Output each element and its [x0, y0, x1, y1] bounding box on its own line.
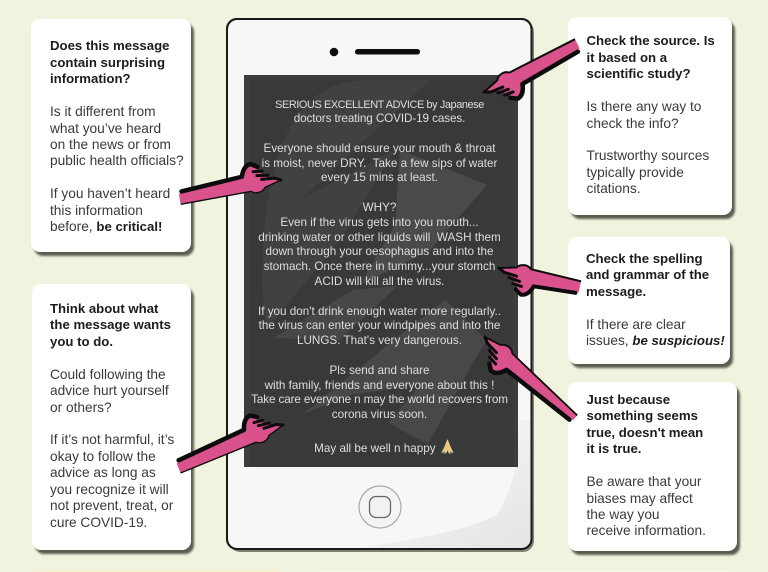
phone message text: LUNGS. That's very dangerous.: [297, 334, 462, 347]
phone message text: SERIOUS EXCELLENT ADVICE by Japanese: [275, 98, 484, 110]
text: check the source: Check the source. Is: [586, 33, 715, 48]
phone message text: stomach. Once there in tummy...your stomch: [264, 260, 495, 273]
text: seems true: Just because: [586, 392, 670, 407]
text: seems true: biases may affect: [586, 490, 693, 506]
panel: spelling and grammar: [568, 237, 730, 364]
text: seems true: something seems: [586, 408, 698, 423]
phone message text: drinking water or other liquids will WASH them: [258, 231, 501, 244]
phone message text: every 15 mins at least.: [321, 171, 438, 184]
text: surprising information: information?: [50, 71, 131, 86]
text: what the message wants: you recognize it will: [50, 482, 169, 497]
bottom strip: right: [320, 570, 735, 572]
text: what the message wants: advice hurt yourself: [50, 383, 169, 398]
text: seems true: true, doesn't mean: [586, 425, 703, 440]
text: check the source: check the info?: [586, 116, 679, 131]
text: spelling and grammar: Check the spelling: [586, 251, 703, 266]
text: what the message wants: not prevent, treat, or: [50, 498, 173, 513]
panel: check the source: [568, 17, 732, 215]
phone message text: down through your oesophagus and into the: [265, 245, 494, 258]
phone message text: WHY?: [363, 201, 396, 214]
text: seems true: it is true.: [586, 441, 641, 456]
panel: surprising information: [31, 19, 191, 252]
text: seems true: the way you: [586, 507, 660, 522]
text: check the source: Is there any way to: [586, 99, 701, 114]
text: what the message wants: Could following the: [50, 367, 166, 382]
text: what the message wants: you to do.: [50, 334, 113, 349]
panel: seems true: [568, 382, 737, 551]
text: check the source: scientific study?: [586, 66, 691, 81]
text: what the message wants: okay to follow the: [50, 449, 156, 464]
phone message text: ACID will kill all the virus.: [315, 275, 444, 288]
bottom strip: left: [34, 570, 284, 572]
text: check the source: [586, 33, 715, 196]
text: what the message wants: Think about what: [50, 301, 158, 316]
phone message text: corona virus soon.: [332, 408, 427, 421]
arrow: pointing hand from surprising information panel: [176, 159, 282, 206]
panel: what the message wants: [32, 284, 191, 550]
home button: [359, 486, 401, 528]
text: surprising information: Does this message: [50, 38, 169, 53]
text: what the message wants: cure COVID-19.: [50, 515, 147, 530]
arrow: pointing hand from check the source panel: [480, 37, 587, 111]
text: what the message wants: advice as long as: [50, 465, 156, 480]
text: surprising information: before, be critical!: [50, 219, 162, 234]
arrow: pointing hand from what the message wants panel: [170, 406, 286, 475]
text: spelling and grammar: and grammar of the: [586, 267, 709, 282]
text: spelling and grammar: issues, be suspicious!: [586, 333, 725, 348]
phone message text: May all be well n happy: [314, 442, 436, 455]
phone message text: [251, 98, 508, 455]
phone message text: Pls send and share: [329, 364, 430, 377]
phone body: [227, 19, 534, 552]
text: surprising information: [50, 38, 184, 234]
text: what the message wants: the message wants: [50, 317, 171, 332]
phone message text: doctors treating COVID-19 cases.: [294, 112, 465, 125]
text: check the source: Trustworthy sources: [586, 148, 709, 163]
text: surprising information: what you’ve heard: [50, 121, 161, 136]
text: surprising information: Is it different from: [50, 104, 155, 119]
phone message text: Even if the virus gets into you mouth...: [280, 216, 479, 229]
text: spelling and grammar: [586, 251, 725, 348]
text: surprising information: this information: [50, 203, 143, 218]
screen: [244, 75, 518, 467]
text: surprising information: on the news or from: [50, 137, 171, 152]
speaker: [355, 49, 420, 54]
text: spelling and grammar: If there are clear: [586, 317, 686, 332]
text: check the source: citations.: [586, 181, 641, 196]
text: seems true: Be aware that your: [586, 474, 701, 489]
phone message text: Take care everyone n may the world recovers from: [251, 393, 508, 406]
text: spelling and grammar: message.: [586, 284, 646, 299]
phone message text: is moist, never DRY. Take a few sips of water: [262, 157, 497, 170]
text: what the message wants: [50, 301, 174, 530]
text: surprising information: If you haven’t heard: [50, 186, 170, 201]
phone message text: Everyone should ensure your mouth & throat: [264, 142, 495, 155]
text: check the source: it based on a: [586, 50, 667, 65]
arrow: pointing hand from spelling and grammar panel: [494, 260, 582, 307]
phone message text: with family, friends and everyone about this !: [265, 379, 494, 392]
text: what the message wants: If it’s not harmful, it’s: [50, 432, 174, 447]
text: check the source: typically provide: [586, 165, 684, 180]
text: seems true: [586, 392, 706, 538]
text: surprising information: public health officials?: [50, 153, 184, 168]
camera: [330, 48, 338, 56]
text: seems true: receive information.: [586, 523, 706, 538]
phone message text: If you don't drink enough water more regularly..: [258, 305, 501, 318]
text: surprising information: contain surprising: [50, 55, 165, 70]
arrow: pointing hand from seems true panel: [471, 331, 581, 434]
phone message text: the virus can enter your windpipes and into the: [259, 319, 500, 332]
text: what the message wants: or others?: [50, 400, 112, 414]
